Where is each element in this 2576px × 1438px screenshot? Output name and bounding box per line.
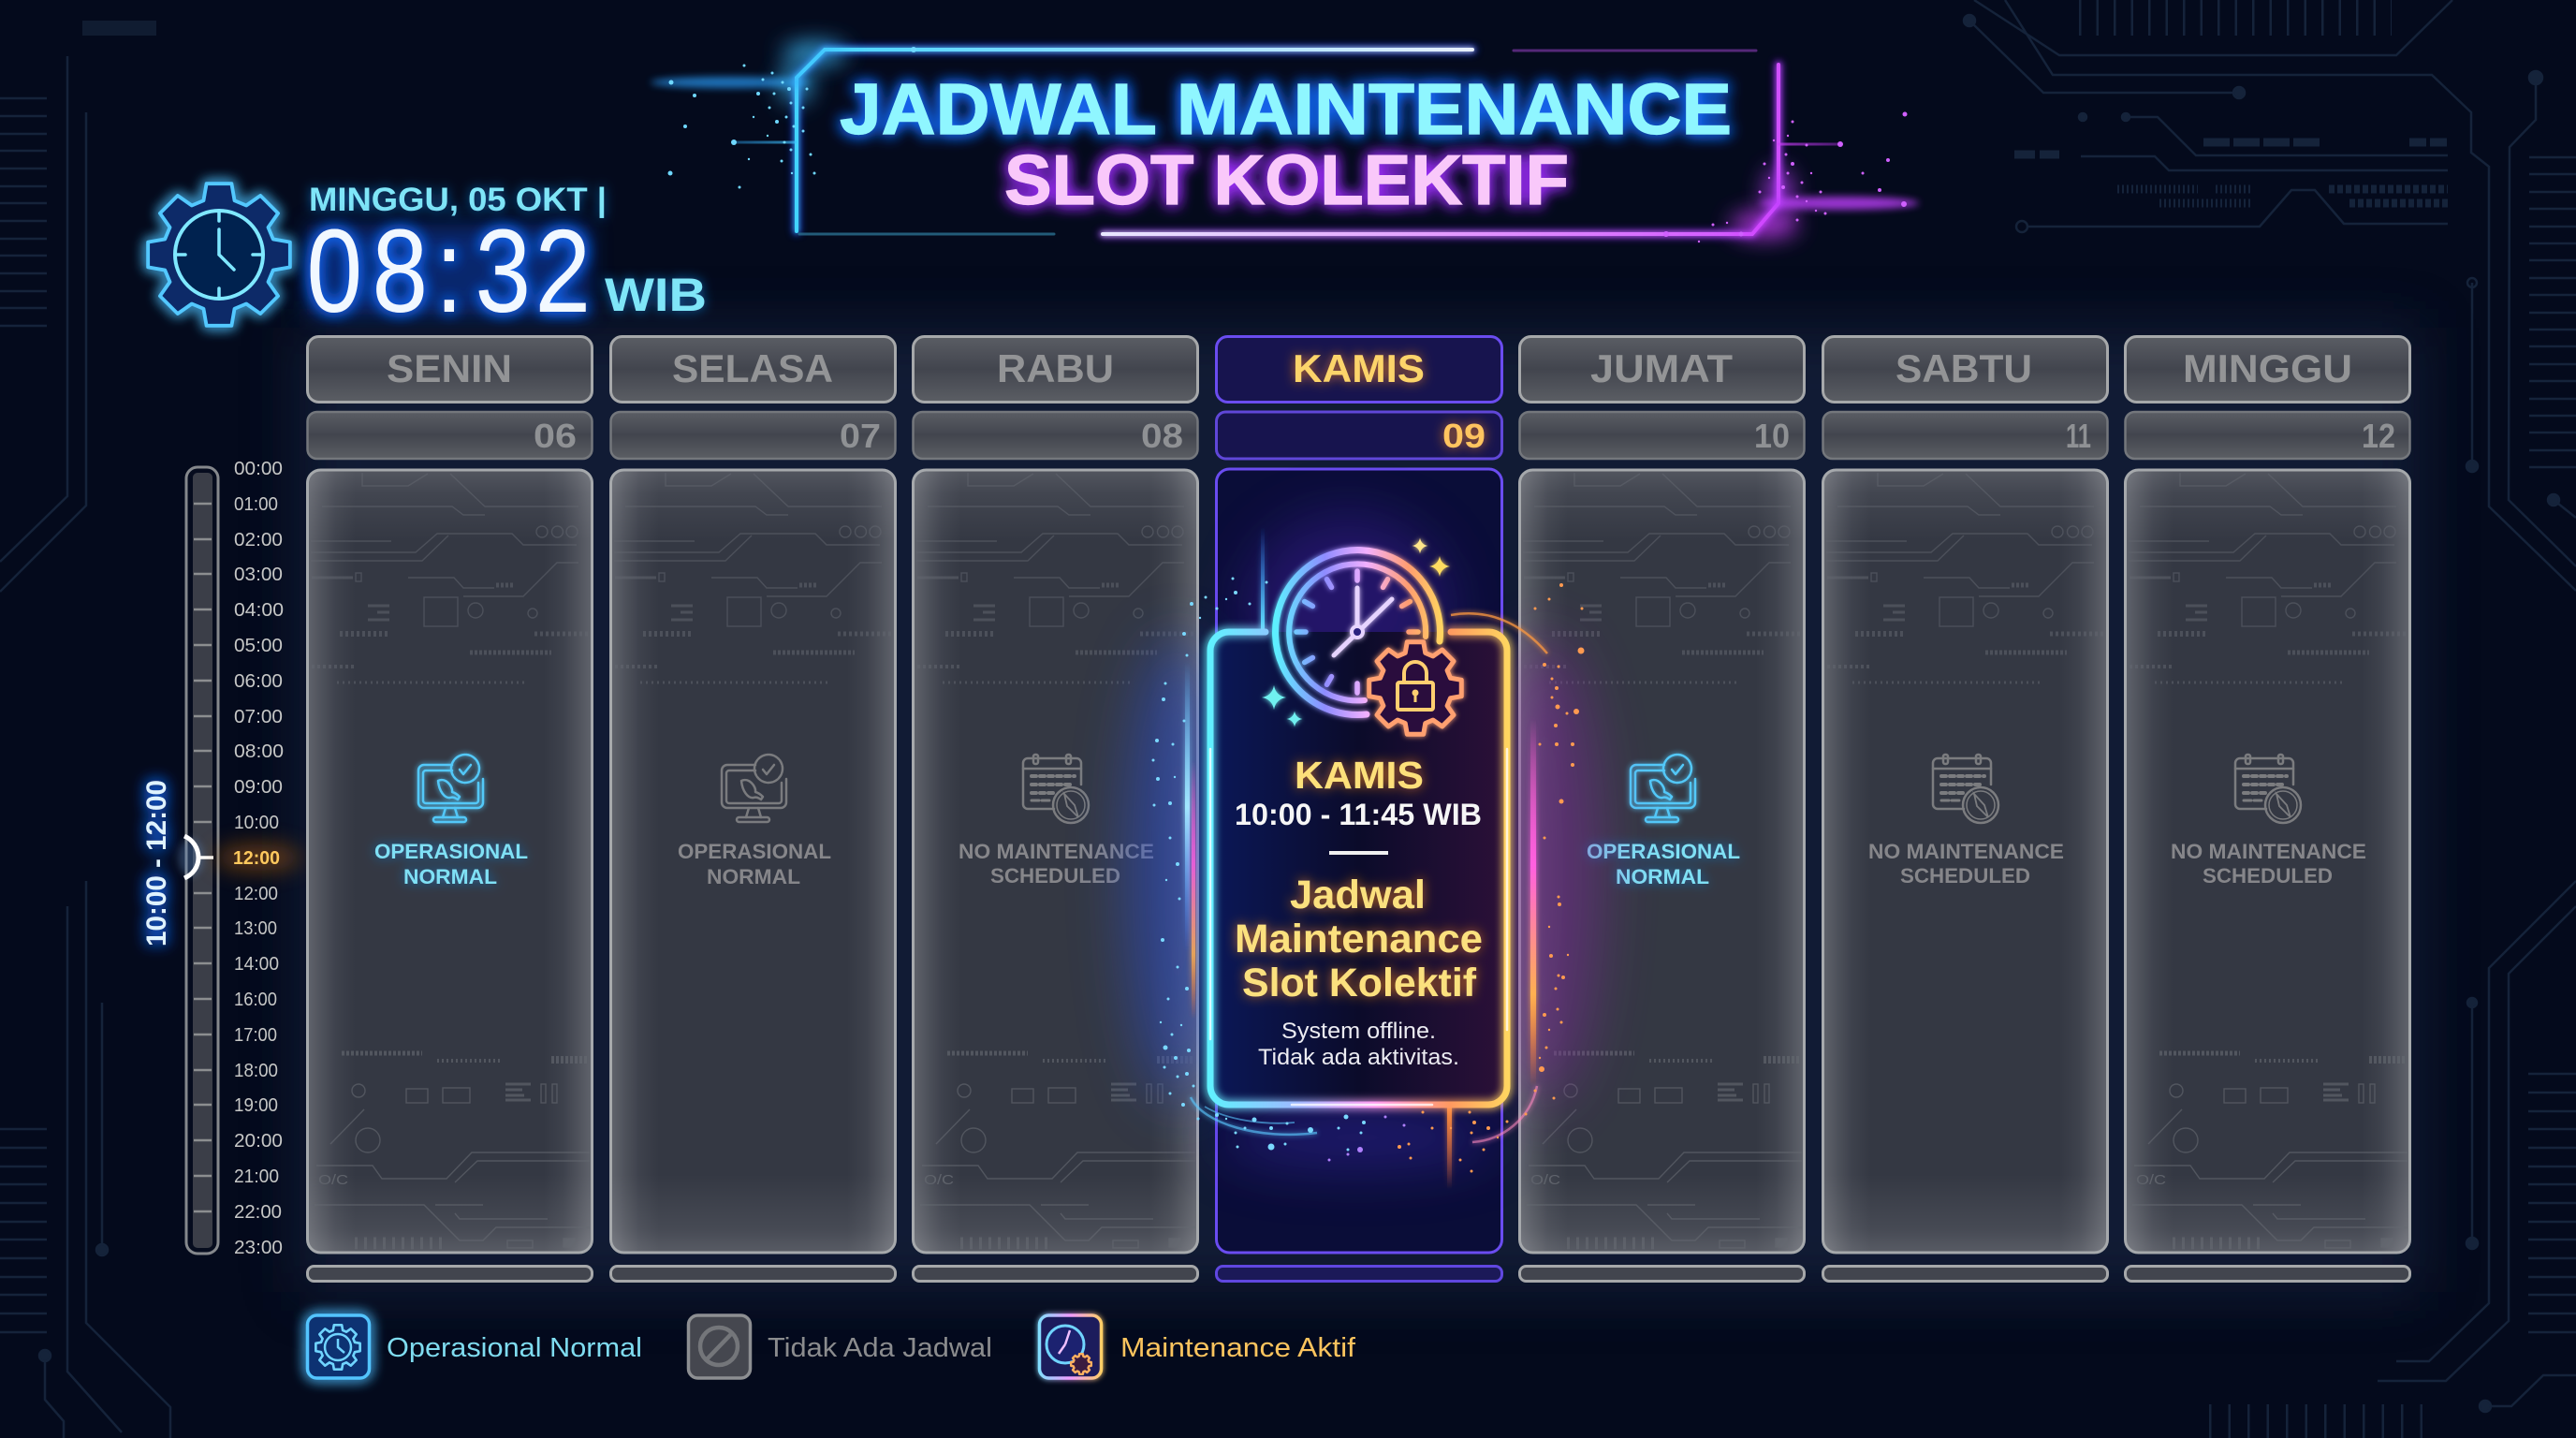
day name: KAMIS <box>1293 346 1425 390</box>
date: 06 <box>534 417 577 455</box>
status <box>2171 840 2366 888</box>
card body <box>1210 632 1507 1105</box>
card neon border <box>1210 632 1507 1105</box>
panel: rabu <box>914 337 1198 1281</box>
status: SCHEDULED <box>990 864 1120 888</box>
status: NO MAINTENANCE <box>2171 840 2366 863</box>
panel: senin <box>307 337 592 1281</box>
footer bar <box>1217 1266 1501 1281</box>
title sparks <box>668 47 916 189</box>
hour labels: 14:00 <box>234 954 279 975</box>
status <box>678 840 831 888</box>
date: 07 <box>840 417 881 455</box>
day name: MINGGU <box>2183 346 2352 390</box>
icon: monitor ok <box>722 755 786 822</box>
digital clock backdrop <box>307 225 590 315</box>
hour labels: 20:00 <box>234 1131 283 1152</box>
lock gear <box>1369 642 1461 734</box>
date label: MINGGU, 05 OKT | <box>309 182 607 218</box>
time range label: 10:00 - 12:00 <box>141 780 172 946</box>
sparkles <box>1262 537 1450 726</box>
day name: SELASA <box>672 346 833 390</box>
hour labels: 02:00 <box>234 530 283 550</box>
soft glow behind calendar grid <box>300 328 2420 1292</box>
legend: operasional normal <box>307 1315 642 1378</box>
title frame <box>651 42 1919 238</box>
panel: rabu: O/C <box>924 1172 954 1188</box>
card note: Tidak ada aktivitas. <box>1258 1045 1459 1070</box>
icon: monitor ok <box>1631 755 1695 822</box>
hour labels: 03:00 <box>234 565 283 585</box>
status: NORMAL <box>707 865 800 888</box>
status <box>1587 840 1740 888</box>
hour labels <box>215 459 301 1258</box>
date: 12 <box>2362 417 2395 455</box>
card note <box>1258 1019 1459 1070</box>
legend <box>307 1315 1356 1378</box>
hour labels: 19:00 <box>234 1095 278 1116</box>
status: OPERASIONAL <box>678 840 831 863</box>
title line 2: SLOT KOLEKTIF <box>1004 140 1569 219</box>
card title: Jadwal <box>1290 873 1426 917</box>
panel: jumat <box>1520 337 1805 1281</box>
day name: SENIN <box>387 346 512 390</box>
hour labels: 09:00 <box>234 777 283 798</box>
status <box>959 840 1154 888</box>
legend: tidak ada jadwal <box>689 1315 992 1378</box>
hour labels: 23:00 <box>234 1238 283 1258</box>
panel: jumat: O/C <box>1530 1172 1560 1188</box>
status <box>374 840 528 888</box>
icon: calendar compass <box>2235 755 2301 823</box>
card divider <box>1329 851 1388 855</box>
hour labels: 10:00 <box>234 813 279 833</box>
date box <box>1217 412 1501 459</box>
icon: gear clock <box>148 183 290 326</box>
hour labels: 00:00 <box>234 459 283 479</box>
status: NO MAINTENANCE <box>1868 840 2064 863</box>
icon: calendar compass <box>1023 755 1089 823</box>
digital clock: 08:32 <box>307 205 591 337</box>
particles: violet <box>1327 1116 1406 1161</box>
card title <box>1235 873 1483 1005</box>
day name: JUMAT <box>1590 346 1733 390</box>
hour labels: 04:00 <box>234 600 284 621</box>
particles: cool <box>1151 577 1366 1152</box>
time axis <box>141 459 301 1258</box>
panel: selasa <box>610 337 895 1281</box>
day name: SABTU <box>1895 346 2032 390</box>
hour labels: 16:00 <box>234 990 277 1010</box>
neon glow spill around card <box>1126 515 1601 1189</box>
status: OPERASIONAL <box>374 840 528 863</box>
icon: monitor ok <box>418 755 483 822</box>
card note: System offline. <box>1281 1019 1436 1044</box>
status: SCHEDULED <box>2203 864 2333 888</box>
panel: senin: O/C <box>318 1172 348 1188</box>
date: 09 <box>1442 417 1486 455</box>
card title: Maintenance <box>1235 917 1483 961</box>
date and time block <box>148 182 707 337</box>
clock hands <box>1334 588 1392 655</box>
hour labels: 12:00 <box>234 884 278 904</box>
legend: maintenance aktif <box>1039 1315 1356 1378</box>
day name: RABU <box>997 346 1114 390</box>
legend: tidak ada jadwal: Tidak Ada Jadwal <box>768 1333 992 1363</box>
legend: maintenance aktif: Maintenance Aktif <box>1120 1333 1356 1363</box>
hour labels: 05:00 <box>234 636 283 656</box>
card time: 10:00 - 11:45 WIB <box>1235 798 1482 831</box>
hour labels: 06:00 <box>234 671 283 692</box>
hour labels: 12:00 <box>233 848 280 869</box>
legend: operasional normal: Operasional Normal <box>387 1333 642 1363</box>
column body <box>1217 469 1501 1253</box>
time zone: WIB <box>605 269 707 321</box>
title panel <box>651 42 1919 242</box>
panel: minggu: O/C <box>2136 1172 2166 1188</box>
hour labels: 21:00 <box>234 1167 279 1187</box>
status: OPERASIONAL <box>1587 840 1740 863</box>
status: NO MAINTENANCE <box>959 840 1154 863</box>
maintenance card <box>1151 537 1584 1172</box>
panel: minggu <box>2125 337 2409 1281</box>
status: NORMAL <box>403 865 497 888</box>
date: 10 <box>1754 417 1790 455</box>
status: SCHEDULED <box>1900 864 2030 888</box>
hour labels: 17:00 <box>234 1025 277 1046</box>
hour labels: 07:00 <box>234 707 283 727</box>
status: NORMAL <box>1616 865 1709 888</box>
icon: clock with lock gear <box>1262 537 1461 734</box>
clock arcs <box>1276 550 1441 715</box>
timeline bar <box>186 467 218 1254</box>
hour labels: 01:00 <box>234 494 278 515</box>
particles: warm <box>1398 583 1584 1172</box>
date: 11 <box>2066 417 2091 455</box>
icon: calendar compass <box>1933 755 1998 823</box>
card title: Slot Kolektif <box>1242 961 1477 1005</box>
hour labels: 13:00 <box>234 918 277 939</box>
status <box>1868 840 2064 888</box>
title line 1: JADWAL MAINTENANCE <box>840 69 1732 150</box>
hour labels: 08:00 <box>234 741 284 762</box>
panel: kamis active column <box>1217 337 1501 1281</box>
hour labels: 22:00 <box>234 1202 282 1223</box>
hour labels: 18:00 <box>234 1061 278 1081</box>
current time marker <box>178 836 213 878</box>
panel: sabtu <box>1823 337 2108 1281</box>
date: 08 <box>1141 417 1183 455</box>
card day: KAMIS <box>1295 754 1424 797</box>
kamis header <box>1217 337 1501 403</box>
